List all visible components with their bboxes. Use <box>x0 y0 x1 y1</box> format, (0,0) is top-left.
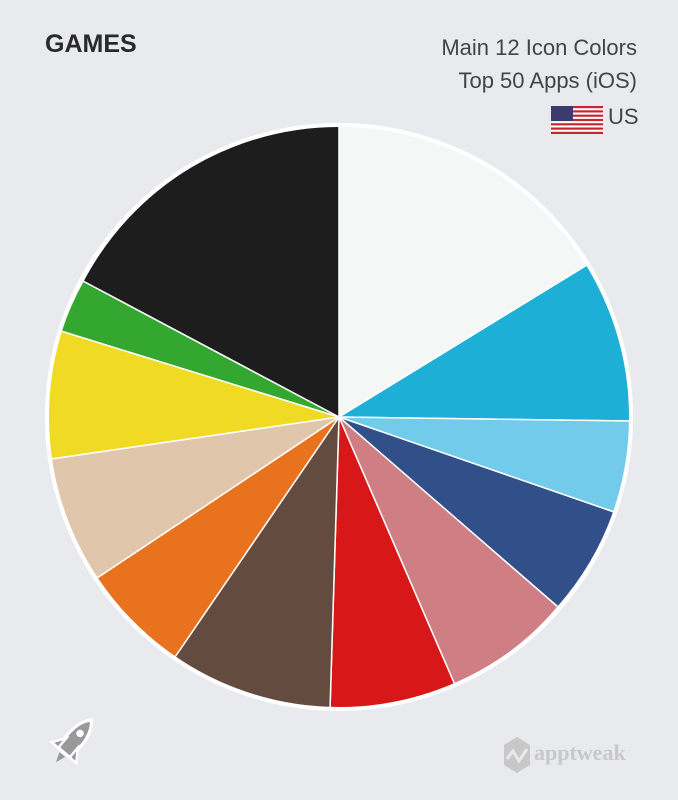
logo: apptweak: apptweak <box>534 740 626 765</box>
logo: apptweak <box>504 737 626 773</box>
subtitle: Main 12 Icon Colors <box>441 35 637 60</box>
text: US: US <box>608 104 639 129</box>
icon: US flag <box>551 106 603 134</box>
icon: rocket <box>49 718 93 766</box>
subtitle <box>441 35 637 93</box>
title: GAMES <box>45 30 137 58</box>
country label <box>551 104 639 134</box>
subtitle: Top 50 Apps (iOS) <box>458 68 637 93</box>
